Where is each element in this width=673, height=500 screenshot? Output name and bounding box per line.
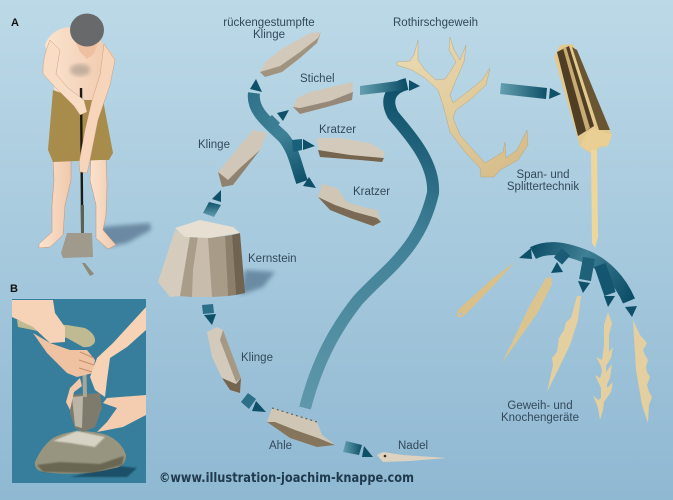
label: Ahle: Ahle — [269, 440, 292, 452]
arrow head to antler shaft — [549, 88, 561, 99]
scraper face — [318, 184, 381, 226]
label: Geweih- und Knochengeräte: Knochengeräte — [501, 412, 579, 424]
core top — [175, 220, 240, 238]
stub to Kratzer — [292, 139, 302, 152]
flute one — [158, 230, 190, 297]
label: Span- und Splittertechnik: Span- und — [516, 169, 570, 181]
arrow: lower blade to Ahle — [241, 393, 266, 412]
flute three — [192, 236, 215, 297]
label: Kratzer lower: Kratzer — [353, 186, 390, 198]
label: rückengestumpfte Klinge: Klinge — [253, 29, 285, 41]
label: Stichel: Stichel — [300, 73, 335, 85]
branch four — [600, 265, 610, 294]
groove light strip — [563, 47, 590, 131]
right leg — [90, 158, 116, 249]
flow band: Ahle to Rothirschgeweih — [305, 84, 433, 408]
eyed needle — [457, 262, 515, 317]
decorated point — [502, 277, 552, 363]
branch two — [558, 252, 566, 261]
blade edge — [260, 32, 321, 77]
copyright: ©www.illustration-joachim-knappe.com — [159, 471, 414, 486]
arrowhead four — [604, 296, 615, 307]
core light facet — [72, 396, 83, 428]
groove two — [572, 47, 610, 130]
blade tip — [222, 378, 241, 393]
stub — [241, 393, 256, 409]
blade face — [260, 32, 321, 77]
main branch band — [254, 93, 302, 182]
core stone — [158, 220, 245, 297]
panel background — [12, 299, 146, 483]
blade edge — [218, 150, 260, 187]
label: Klinge: Klinge — [198, 139, 230, 151]
head — [204, 314, 216, 325]
loincloth — [48, 90, 113, 162]
label: Klinge lower: Klinge — [241, 352, 273, 364]
stone: burin — [293, 82, 353, 114]
label A: A — [11, 17, 19, 29]
antler shaft with grooves — [554, 44, 612, 153]
panel B: detail of hands striking — [12, 299, 146, 483]
awl retouch — [272, 408, 317, 422]
main arc — [533, 249, 629, 301]
arrow head to antler — [409, 80, 420, 91]
branch: blade to tools — [250, 79, 316, 188]
blade face — [207, 327, 241, 393]
flute two — [180, 236, 198, 297]
arrow: Ahle to Nadel — [343, 441, 373, 457]
arrowhead to blunted blade — [250, 79, 262, 92]
upper arm and hand — [12, 300, 65, 343]
arrow stub to antler shaft — [500, 83, 547, 99]
label: Span- und Splittertechnik: Splittertechnik — [507, 181, 579, 193]
awl edge — [267, 422, 335, 447]
hair — [70, 14, 104, 46]
groove one — [557, 46, 594, 136]
struck blade — [82, 263, 94, 276]
arrowhead to Kratzer — [303, 139, 315, 150]
anvil shadow — [70, 466, 137, 477]
single-row harpoon — [633, 320, 652, 423]
single-barbed point — [547, 296, 581, 392]
label: Rothirschgeweih: Rothirschgeweih — [393, 17, 478, 29]
head — [212, 190, 221, 202]
arrow: core to lower blade — [202, 304, 216, 325]
needle eye — [384, 455, 386, 457]
punch — [82, 350, 87, 397]
scraper face — [317, 138, 385, 162]
bone needle — [377, 452, 447, 462]
stone: blade — [218, 130, 267, 187]
boulder — [35, 431, 126, 474]
label: rückengestumpfte Klinge: rückengestumpfte — [223, 17, 315, 29]
label: Geweih- und Knochengeräte: Geweih- und — [507, 400, 573, 412]
arrow: core to blade — [203, 190, 221, 217]
left leg — [39, 160, 71, 248]
core held on anvil — [69, 393, 102, 432]
antler and bone tools — [457, 262, 652, 423]
label: Kratzer: Kratzer — [319, 124, 356, 136]
arrow stub to antler — [360, 80, 405, 95]
stick — [81, 88, 82, 205]
burin face — [293, 82, 353, 114]
label: Nadel: Nadel — [398, 440, 428, 452]
arrowhead five — [625, 306, 637, 317]
label B: B — [10, 283, 18, 295]
flute six — [232, 233, 245, 295]
antler: Rothirschgeweih — [397, 37, 528, 177]
arrowhead to lower Kratzer — [303, 177, 316, 188]
needle body — [377, 452, 447, 462]
head — [252, 401, 266, 412]
boulder shading — [37, 456, 124, 473]
core stone shadow — [240, 270, 275, 295]
right arm — [79, 44, 115, 173]
blade side — [220, 330, 241, 382]
stub to Stichel — [266, 115, 280, 129]
arrowhead three — [578, 281, 590, 293]
punch tip — [80, 205, 84, 235]
right arm — [90, 307, 146, 397]
steadying hand — [97, 395, 146, 432]
blade face — [218, 130, 267, 187]
stone: scraper two — [318, 184, 381, 226]
ground shadow — [100, 223, 151, 247]
face — [75, 40, 98, 59]
arrowhead to Stichel — [277, 110, 289, 121]
branch three — [585, 258, 589, 280]
awl face — [267, 408, 335, 447]
splinter — [591, 150, 598, 248]
scraper edge — [318, 150, 384, 162]
stone: lower blade — [207, 327, 241, 393]
torso — [45, 27, 114, 102]
small core — [61, 233, 93, 258]
lower arm and hand — [33, 333, 95, 377]
stub — [343, 441, 362, 455]
arrowhead two — [551, 262, 563, 273]
boulder highlight — [53, 431, 105, 447]
scraper edge — [318, 197, 381, 226]
flow band: tool branches — [519, 248, 637, 317]
left arm — [43, 40, 87, 115]
head — [362, 446, 373, 457]
burin edge — [293, 92, 353, 114]
label: Kernstein: Kernstein — [248, 253, 297, 265]
stub — [203, 202, 221, 217]
stub — [202, 304, 214, 314]
flute five — [225, 235, 236, 296]
hammer — [17, 320, 95, 347]
stone: scraper one — [317, 138, 385, 162]
stone: blunted blade — [260, 32, 321, 77]
arrowhead one — [519, 248, 532, 259]
shaft body — [554, 44, 612, 153]
flute four — [208, 236, 228, 297]
figure A: man striking blades from a core — [39, 14, 151, 276]
needle eye — [459, 312, 462, 316]
chest hair — [70, 64, 90, 76]
shaft end — [580, 128, 612, 153]
supporting fingers — [66, 378, 82, 410]
fingers on punch — [79, 352, 94, 372]
double-barbed harpoon — [593, 312, 613, 420]
stone: awl — [267, 408, 335, 447]
